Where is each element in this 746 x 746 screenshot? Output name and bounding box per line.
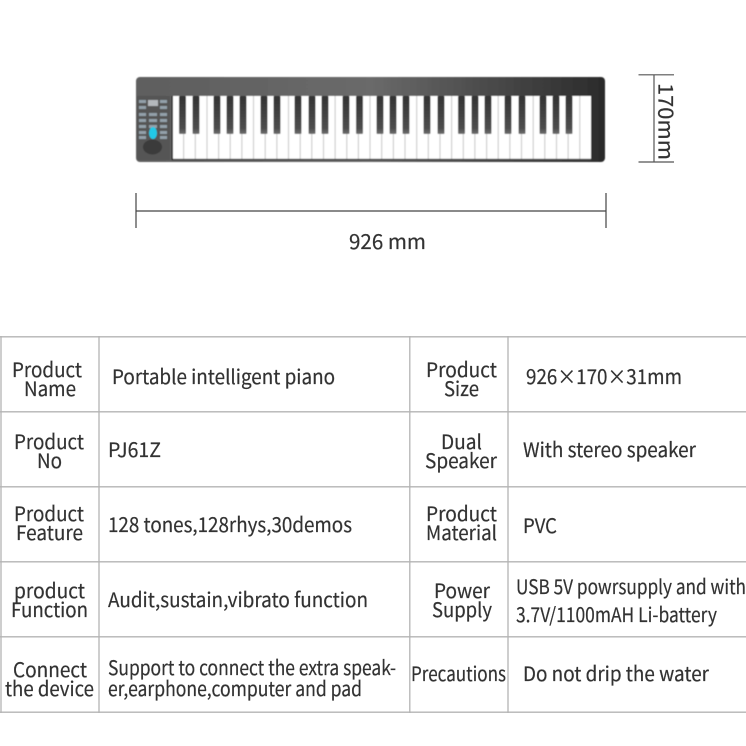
row 3: product feature and material: 128 tones,128rhys,30demos <box>108 509 352 538</box>
row 3: product feature and material: Product <box>14 498 84 527</box>
white keys <box>172 96 591 160</box>
label: 170mm: 170mm <box>652 83 682 160</box>
row 1: product name and size: Product <box>12 354 82 383</box>
black keys <box>179 96 572 134</box>
row 3: product feature and material: PVC <box>523 510 557 539</box>
piano keyboard <box>136 77 605 162</box>
row 4: product function and power supply: Supply <box>432 594 493 623</box>
speaker grille <box>143 140 162 154</box>
row 1: product name and size: 926×170×31mm <box>526 361 682 390</box>
row 3: product feature and material <box>14 498 557 546</box>
row 5: connections and precautions: Do not drip the water <box>523 658 709 687</box>
row 5: connections and precautions: er,earphone,computer and pad <box>108 673 362 702</box>
height dimension <box>638 75 682 162</box>
row 5: connections and precautions <box>5 652 709 702</box>
row 3: product feature and material: Feature <box>16 517 83 546</box>
cyan dial <box>149 127 157 139</box>
row 4: product function and power supply: product <box>14 575 85 604</box>
row 5: connections and precautions: the device <box>5 673 94 702</box>
row 3: product feature and material: Material <box>426 517 497 546</box>
table grid <box>0 336 746 713</box>
row 5: connections and precautions: Connect <box>13 654 87 683</box>
row 3: product feature and material: Product <box>426 498 497 527</box>
label: 926 mm: 926 mm <box>349 226 426 255</box>
width dimension <box>136 193 606 255</box>
row 4: product function and power supply: Audit,sustain,vibrato function <box>108 584 368 613</box>
row 5: connections and precautions: Precautions <box>411 658 506 687</box>
row 2: product number and speaker: Speaker <box>425 445 497 474</box>
row 1: product name and size: Product <box>426 354 497 383</box>
row 2: product number and speaker: No <box>37 445 62 474</box>
row 4: product function and power supply <box>11 571 746 628</box>
row 2: product number and speaker: PJ61Z <box>108 434 161 463</box>
row 1: product name and size <box>12 354 682 402</box>
row 1: product name and size: Size <box>444 373 479 402</box>
row 5: connections and precautions: Support to connect the extra speak- <box>108 652 396 681</box>
row 4: product function and power supply: 3.7V/1100mAH Li-battery <box>516 599 717 628</box>
keyboard body <box>136 77 605 162</box>
row 1: product name and size: Portable intelligent piano <box>112 361 335 390</box>
row 2: product number and speaker <box>14 426 696 474</box>
specification table <box>0 336 746 713</box>
control panel <box>137 96 170 160</box>
row 4: product function and power supply: Function <box>11 594 88 623</box>
display <box>148 100 158 106</box>
row 2: product number and speaker: Dual <box>441 426 482 455</box>
row 2: product number and speaker: With stereo speaker <box>523 434 696 463</box>
row 4: product function and power supply: Power <box>434 575 490 604</box>
row 2: product number and speaker: Product <box>14 426 84 455</box>
row 1: product name and size: Name <box>24 373 76 402</box>
